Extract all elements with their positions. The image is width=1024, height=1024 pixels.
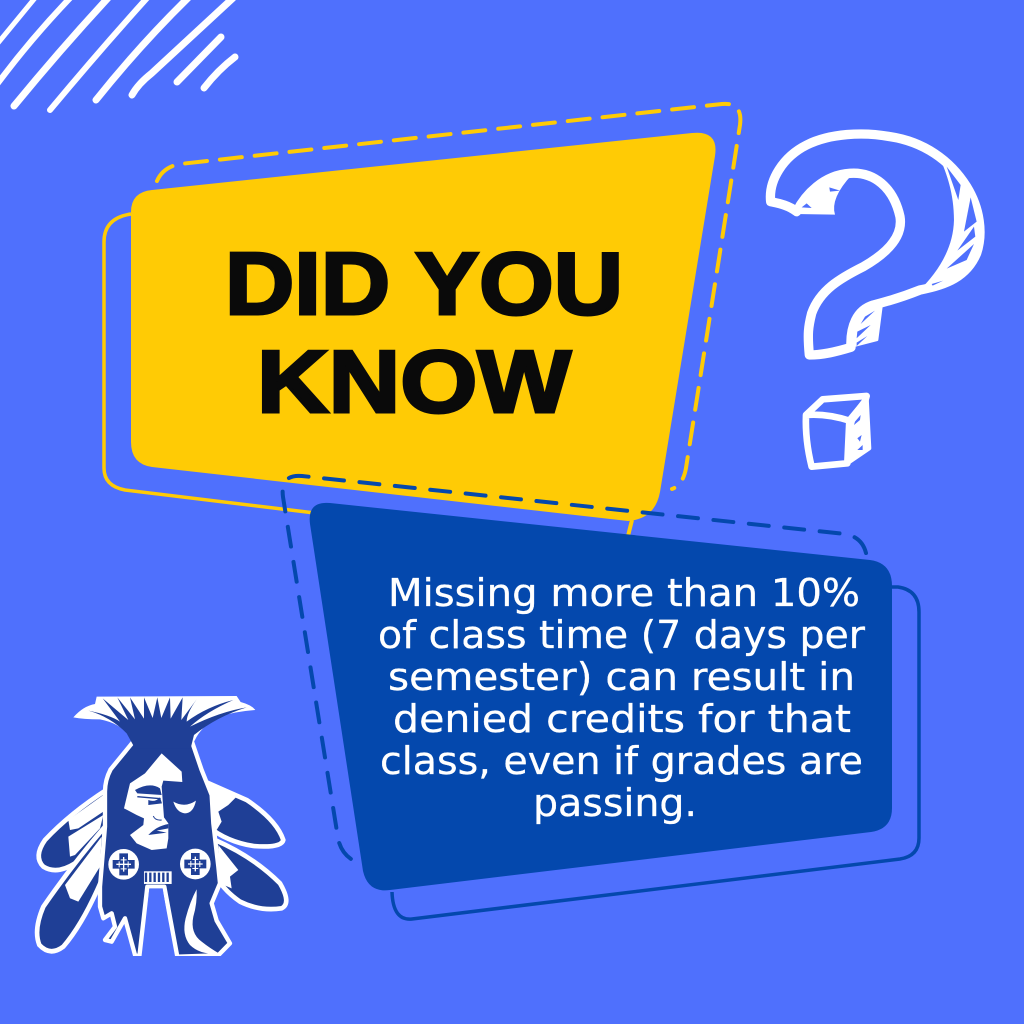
- body text: Missing more than 10%: [388, 571, 860, 615]
- school mascot logo: [37, 696, 286, 958]
- body text: passing.: [533, 781, 697, 825]
- decorative slashes top-left: [0, 0, 235, 110]
- body text: semester) can result in: [388, 655, 855, 699]
- mascot face: [124, 753, 182, 850]
- body text: of class time (7 days per: [378, 613, 865, 657]
- heading: DID YOU: [225, 234, 623, 333]
- body text: [378, 571, 865, 825]
- body text: denied credits for that: [393, 697, 851, 741]
- mascot head and hair: [100, 742, 230, 957]
- blue panel: [310, 503, 892, 890]
- body text: class, even if grades are: [380, 739, 863, 783]
- mascot left medallion: [108, 849, 139, 880]
- mascot feathers: [37, 782, 286, 951]
- question mark outline: [770, 134, 980, 355]
- yellow panel: [131, 133, 716, 521]
- question mark shaded bands: [795, 175, 852, 215]
- heading: KNOW: [257, 332, 571, 431]
- heading: [225, 234, 623, 431]
- question mark dot: [806, 396, 869, 467]
- mascot feather highlights: [65, 785, 238, 902]
- mascot headdress quills: [88, 697, 247, 748]
- question mark hatching: [802, 167, 977, 346]
- yellow outline frames: [104, 104, 740, 536]
- mascot headdress: [73, 696, 255, 747]
- icon: question mark: [770, 134, 982, 467]
- mascot right medallion: [180, 849, 211, 879]
- mascot hair gap: [148, 888, 166, 908]
- mascot closed eyes and mouth: [135, 785, 196, 835]
- mascot fringe: [144, 871, 172, 884]
- mascot hair strand: [184, 889, 220, 954]
- blue outline frames: [283, 476, 919, 919]
